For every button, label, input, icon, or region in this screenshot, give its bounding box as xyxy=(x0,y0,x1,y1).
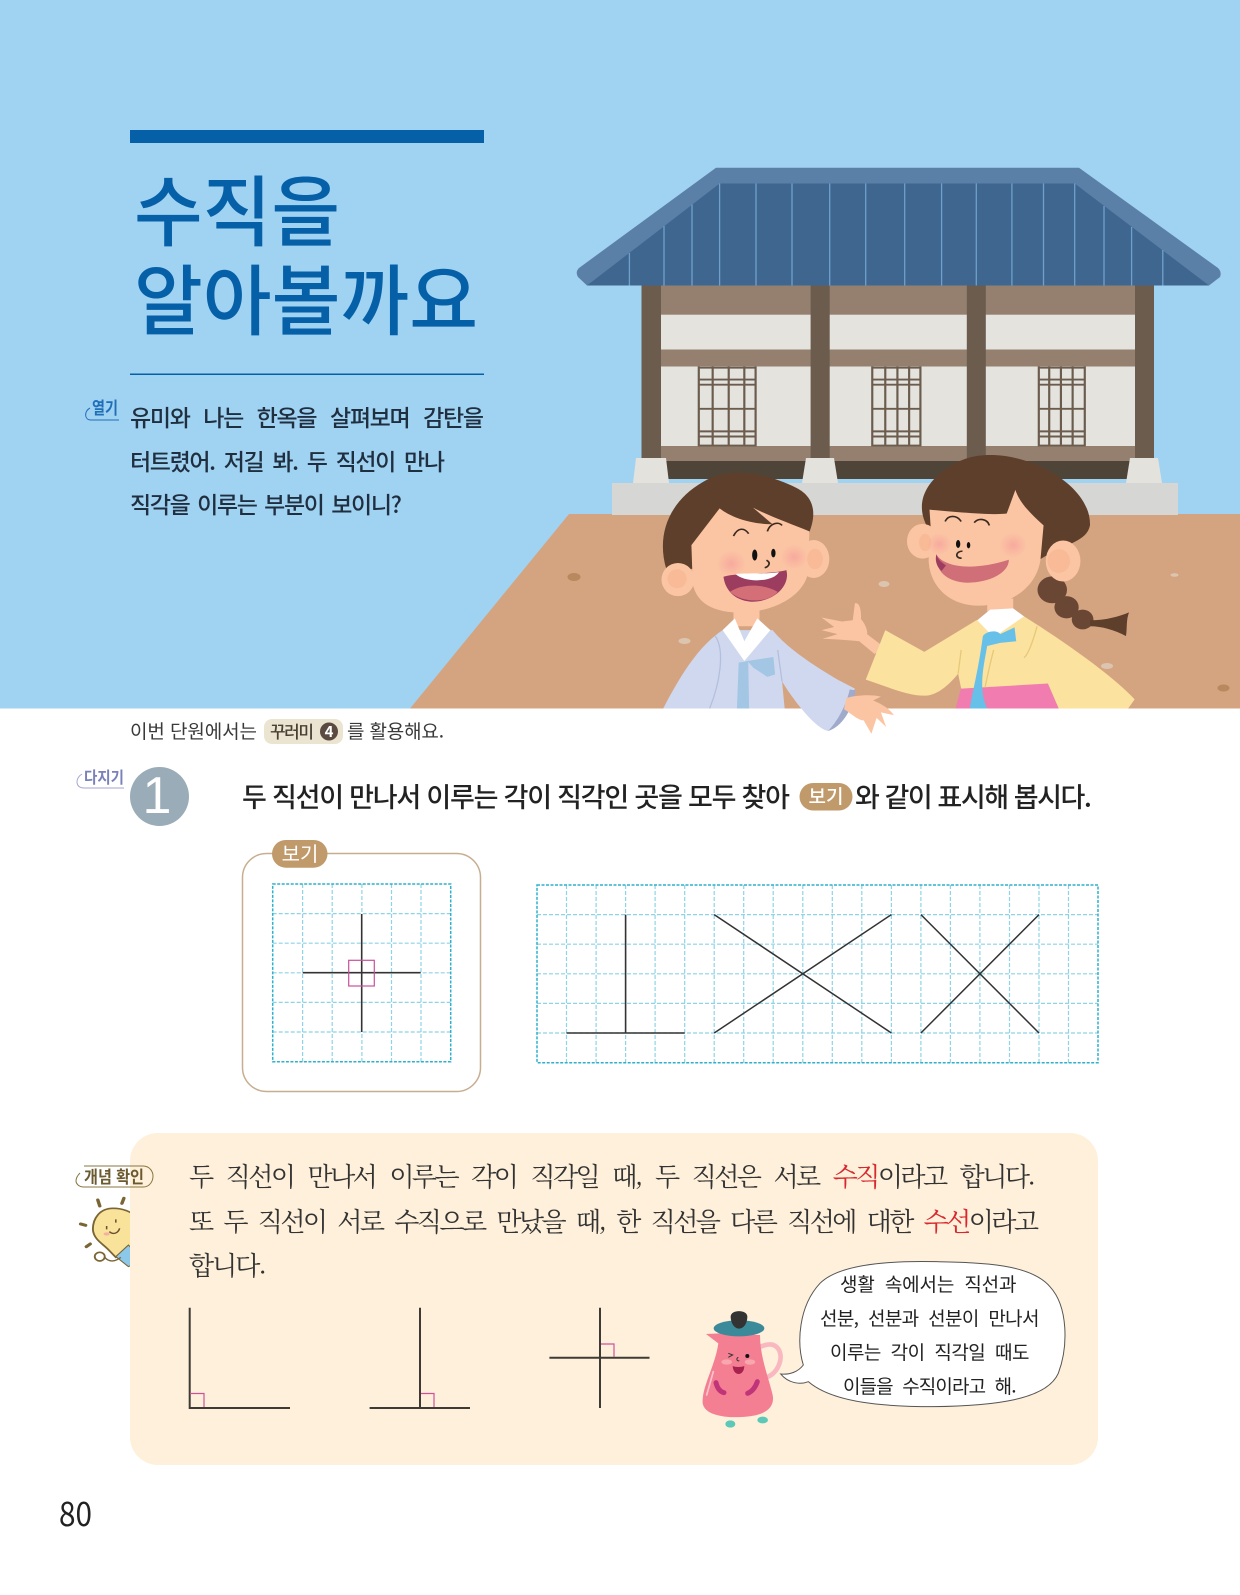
shape: wide X xyxy=(714,915,891,1033)
character: pink jug xyxy=(703,1311,781,1428)
boy eyes and brows xyxy=(733,523,782,568)
girl mouth xyxy=(936,554,1009,583)
tag: 꾸러미 4: 꾸러미 xyxy=(270,718,314,743)
top title rule xyxy=(130,130,484,143)
girl ears xyxy=(907,524,1080,582)
tag: 꾸러미 4 xyxy=(264,718,343,744)
example box xyxy=(242,838,480,1092)
figure: cross right angle xyxy=(549,1308,650,1408)
icon: light bulb xyxy=(81,1198,142,1267)
figure: corner right angle xyxy=(190,1308,290,1408)
ground pebbles xyxy=(568,573,1230,692)
sky background panel xyxy=(0,0,1240,708)
girl hair xyxy=(922,455,1090,559)
bubble text: 이들을 수직이라고 해. xyxy=(843,1372,1015,1399)
illustration: boy in hanbok xyxy=(661,473,894,734)
girl braid xyxy=(1038,576,1129,636)
speech bubble xyxy=(781,1261,1065,1407)
intro text: 유미와 나는 한옥을 살펴보며 감탄을 xyxy=(130,399,484,433)
tag: 열기: 열기 xyxy=(92,394,118,419)
unit note: 를 활용해요. xyxy=(347,717,444,744)
girl raised hand and arm xyxy=(822,603,885,654)
illustration: hanok house and ground xyxy=(410,168,1240,708)
bubble text: 선분, 선분과 선분이 만나서 xyxy=(820,1304,1038,1331)
unit note: 이번 단원에서는 xyxy=(130,717,257,744)
title xyxy=(134,152,478,352)
boy hand xyxy=(844,695,894,734)
lattice windows xyxy=(698,367,1086,446)
unit note xyxy=(130,717,444,744)
question heading: 와 같이 표시해 봅시다. xyxy=(855,776,1092,815)
number badge 1 xyxy=(130,767,189,826)
bubble text xyxy=(820,1270,1038,1399)
boy jacket folds xyxy=(710,636,782,708)
boy jacket xyxy=(663,630,855,731)
pill: 보기 xyxy=(800,782,852,810)
shape: square X xyxy=(921,915,1039,1033)
bubble text: 이루는 각이 직각일 때도 xyxy=(830,1338,1029,1365)
question heading: 두 직선이 만나서 이루는 각이 직각인 곳을 모두 찾아 xyxy=(242,776,790,815)
example label 보기 xyxy=(272,838,328,868)
intro text: 직각을 이루는 부분이 보이니? xyxy=(130,486,402,520)
figure: T right angle xyxy=(370,1308,470,1408)
boy hair xyxy=(663,473,813,569)
girl collar xyxy=(977,608,1024,637)
concept text: 또 두 직선이 서로 수직으로 만났을 때, 한 직선을 다른 직선에 대한 수선이라고 xyxy=(189,1202,1039,1239)
girl cheeks xyxy=(927,533,1027,558)
boy collar xyxy=(723,618,770,661)
tag: 꾸러미 4: 4 xyxy=(325,721,334,742)
tag: 다지기: 다지기 xyxy=(84,764,124,788)
question heading xyxy=(242,776,1092,815)
concept panel xyxy=(130,1133,1098,1465)
boy neck xyxy=(733,603,760,626)
boy cheeks xyxy=(717,544,808,577)
example grid xyxy=(273,884,451,1062)
concept text: 두 직선이 만나서 이루는 각이 직각일 때, 두 직선은 서로 수직이라고 합니다. xyxy=(189,1157,1035,1194)
example right-angle mark xyxy=(349,960,374,986)
thin rule under title xyxy=(130,374,484,375)
boy sleeve edge xyxy=(828,689,856,731)
girl jacket folds xyxy=(958,626,1037,687)
illustration: girl in hanbok xyxy=(822,455,1135,708)
grid lines xyxy=(537,885,1098,1063)
tag: 개념 확인: 개념 확인 xyxy=(84,1163,144,1188)
concept text: 합니다. xyxy=(189,1246,266,1283)
pill: 보기: 보기 xyxy=(809,782,843,809)
house walls and beams xyxy=(642,285,1154,479)
shape: perpendicular T xyxy=(566,915,685,1033)
intro text xyxy=(130,399,484,520)
girl face xyxy=(929,490,1044,606)
page number: 80 xyxy=(59,1488,92,1536)
boy ears xyxy=(661,540,829,596)
girl ribbon xyxy=(970,627,1016,708)
bubble text: 생활 속에서는 직선과 xyxy=(840,1270,1016,1297)
boy mouth xyxy=(724,570,787,602)
stone platform xyxy=(612,483,1178,515)
number badge 1: 1 xyxy=(143,767,171,825)
intro text: 터트렸어. 저길 봐. 두 직선이 만나 xyxy=(130,443,445,477)
title: 알아볼까요 xyxy=(134,241,478,352)
girl jacket xyxy=(866,616,1135,708)
practice grid xyxy=(537,885,1098,1063)
girl neck xyxy=(987,599,1013,614)
foundation stones xyxy=(633,458,1162,483)
concept text xyxy=(189,1157,1039,1283)
example perpendicular cross xyxy=(303,914,421,1032)
example label 보기: 보기 xyxy=(282,838,318,867)
ground xyxy=(410,514,1240,708)
roof xyxy=(577,168,1221,286)
boy face xyxy=(691,508,809,613)
girl eyes and brows xyxy=(945,516,989,558)
girl skirt xyxy=(956,684,1059,708)
title: 수직을 xyxy=(134,152,340,263)
boy ribbon xyxy=(737,657,775,708)
tag: 열기 xyxy=(86,394,119,420)
